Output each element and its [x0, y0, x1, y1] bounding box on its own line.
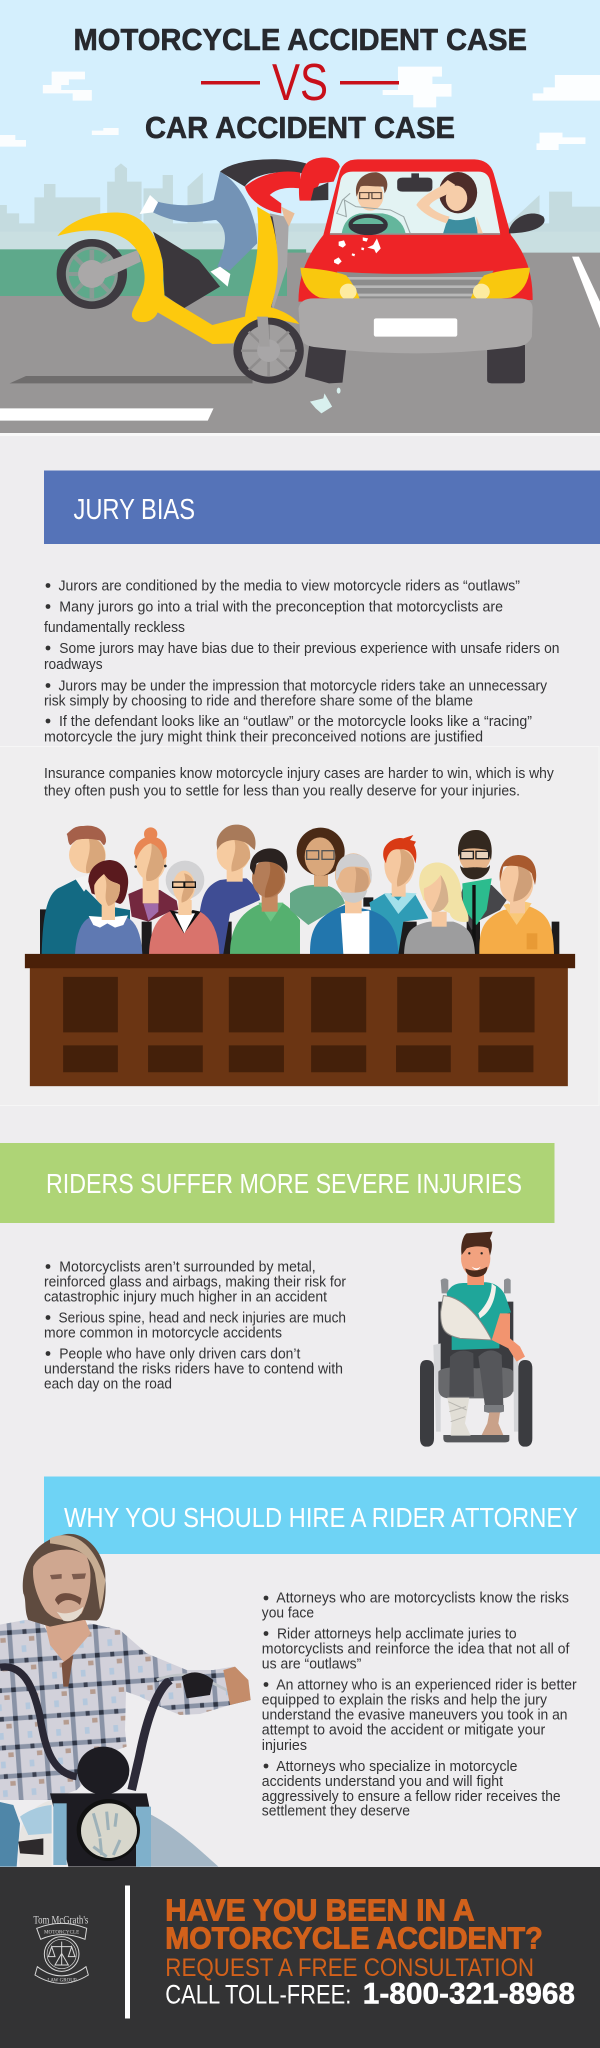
median strip — [0, 249, 306, 298]
head and neck — [43, 1615, 91, 1663]
call to action text — [165, 1892, 575, 2010]
jeans — [0, 1802, 20, 1867]
text block: attorney bullets: motorcyclists and reinforce the idea that not all of — [262, 1642, 570, 1658]
call to action text: 1-800-321-8968 — [363, 1977, 575, 2010]
logo: Tom McGrath's Motorcycle Law Group: Tom McGrath's — [33, 1914, 88, 1926]
front man, blue jacket — [310, 905, 398, 954]
rider — [140, 158, 340, 287]
text block: jury bias bullets: motorcycle the jury might think their preconceived notions are justified — [44, 729, 483, 745]
text block: jury bias bullets: fundamentally reckless — [44, 620, 185, 636]
jurors left half — [40, 825, 300, 954]
text block: injury bullets — [44, 1260, 346, 1393]
skyline — [0, 163, 600, 257]
text block: jury bias bullets: If the defendant looks like an “outlaw” or the motorcycle looks like a “racing” — [59, 714, 532, 730]
text block: injury bullets: reinforced glass and airbags, making their risk for — [44, 1275, 346, 1291]
text block: injury bullets: each day on the road — [44, 1377, 172, 1393]
text block: insurance note: Insurance companies know motorcycle injury cases are harder to win, which is why — [44, 766, 554, 782]
text block: jury bias bullets: risk simply by choosing to ride and therefore share some of the blame — [44, 693, 473, 709]
panel: footer call to action — [0, 1867, 600, 2048]
wheels — [305, 345, 346, 383]
text block: jury bias bullets: Jurors may be under the impression that motorcycle riders take an unnecessary — [58, 679, 548, 695]
text block: attorney bullets: us are “outlaws” — [262, 1657, 361, 1673]
grille — [337, 271, 494, 303]
text block: attorney bullets: equipped to explain the risks and help the jury — [262, 1692, 548, 1708]
text block: jury bias bullets: roadways — [44, 657, 103, 673]
hood damage — [334, 237, 381, 265]
text block: attorney bullets: you face — [262, 1605, 314, 1621]
headlights — [300, 268, 360, 301]
text block: injury bullets: Serious spine, head and neck injuries are much — [58, 1311, 346, 1327]
back row man, navy — [198, 878, 260, 954]
text block: attorney bullets: accidents understand you and will fight — [262, 1774, 503, 1790]
heading: why you should hire a rider attorney — [44, 1476, 600, 1554]
text block: injury bullets: Motorcyclists aren’t surrounded by metal, — [59, 1260, 316, 1276]
title: car accident case: CAR ACCIDENT CASE — [145, 110, 455, 145]
call to action text: REQUEST A FREE CONSULTATION — [165, 1954, 534, 1982]
text block: jury bias bullets: Many jurors go into a trial with the preconception that motorcyclists are — [59, 600, 503, 616]
front man, green shirt — [230, 903, 300, 954]
passenger — [439, 172, 477, 213]
text block: attorney bullets: understand the evasive maneuvers you took in an — [262, 1708, 568, 1724]
front woman, blue dress — [75, 917, 142, 954]
plate — [374, 318, 457, 337]
text block: attorney bullets: Rider attorneys help acclimate juries to — [277, 1626, 517, 1642]
heading: riders suffer more severe injuries — [0, 1143, 554, 1223]
text block: jury bias bullets: Some jurors may have bias due to their previous experience with unsafe riders on — [59, 641, 560, 657]
shards — [310, 393, 332, 413]
text block: jury bias bullets — [44, 578, 560, 745]
headlamp housing and forks — [77, 1747, 129, 1795]
back row man, bearded — [458, 885, 507, 930]
heading: jury bias: JURY BIAS — [74, 494, 195, 526]
jury box woodwork — [25, 954, 575, 1086]
photo illustration: biker on motorcycle — [0, 1534, 251, 1867]
illustration: jury box — [25, 825, 575, 1086]
text block: jury bias bullets: Jurors are conditioned by the media to view motorcycle riders as “outlaws” — [58, 578, 520, 594]
icon: man in wheelchair — [420, 1232, 532, 1447]
clouds — [0, 67, 600, 150]
call to action text: HAVE YOU BEEN IN A — [165, 1892, 475, 1927]
back row woman, orange hair — [128, 888, 178, 922]
text block: attorney bullets: Attorneys who are motorcyclists know the risks — [276, 1591, 569, 1607]
text block: attorney bullets: Attorneys who specialize in motorcycle — [276, 1759, 517, 1775]
back row man, turquoise — [369, 893, 428, 954]
call to action text: CALL TOLL-FREE: — [165, 1979, 351, 2009]
title: motorcycle accident case: MOTORCYCLE ACCIDENT CASE — [74, 22, 527, 57]
divider — [125, 1886, 130, 2018]
text block: injury bullets: People who have only driven cars don’t — [59, 1347, 300, 1363]
text block: attorney bullets: injuries — [262, 1738, 307, 1754]
logo: Tom McGrath's Motorcycle Law Group: MOTORCYCLE — [44, 1930, 79, 1935]
bumper — [298, 298, 533, 353]
text block: injury bullets: understand the risks riders have to contend with — [44, 1362, 343, 1378]
text block: insurance note: they often push you to settle for less than you really deserve for your injuries. — [44, 784, 520, 800]
jurors right half — [290, 828, 559, 955]
front woman, pink cardigan — [149, 912, 219, 954]
front man, orange shirt — [479, 907, 554, 954]
handlebars — [0, 1667, 77, 1777]
back row woman, green top — [290, 885, 345, 925]
text block: injury bullets: catastrophic injury much higher in an accident — [44, 1290, 327, 1306]
text block: attorney bullets — [262, 1591, 577, 1820]
text block: attorney bullets: attempt to avoid the accident or mitigate your — [262, 1723, 545, 1739]
text block: injury bullets: more common in motorcycle accidents — [44, 1326, 282, 1342]
back row man, teal sweater — [42, 879, 130, 954]
logo: Tom McGrath's Motorcycle Law Group — [33, 1914, 88, 1984]
driver — [342, 213, 406, 233]
motorcycle — [57, 207, 304, 384]
text block: attorney bullets: settlement they deserve — [262, 1804, 410, 1820]
text block: attorney bullets: An attorney who is an experienced rider is better — [276, 1677, 577, 1693]
title: versus divider — [201, 54, 399, 112]
logo: Tom McGrath's Motorcycle Law Group: LAW GROUP — [47, 1979, 77, 1984]
red car — [298, 159, 545, 413]
road — [0, 253, 600, 435]
call to action text: MOTORCYCLE ACCIDENT? — [165, 1920, 543, 1955]
heading: jury bias — [44, 470, 600, 544]
text block: attorney bullets: aggressively to ensure a fellow rider receives the — [262, 1789, 561, 1805]
blonde woman — [404, 922, 475, 954]
text block: insurance note — [44, 766, 554, 800]
panel: hero scene — [0, 0, 600, 436]
panel: jury bias lower card — [0, 746, 599, 1106]
title: versus divider: VS — [272, 54, 328, 112]
